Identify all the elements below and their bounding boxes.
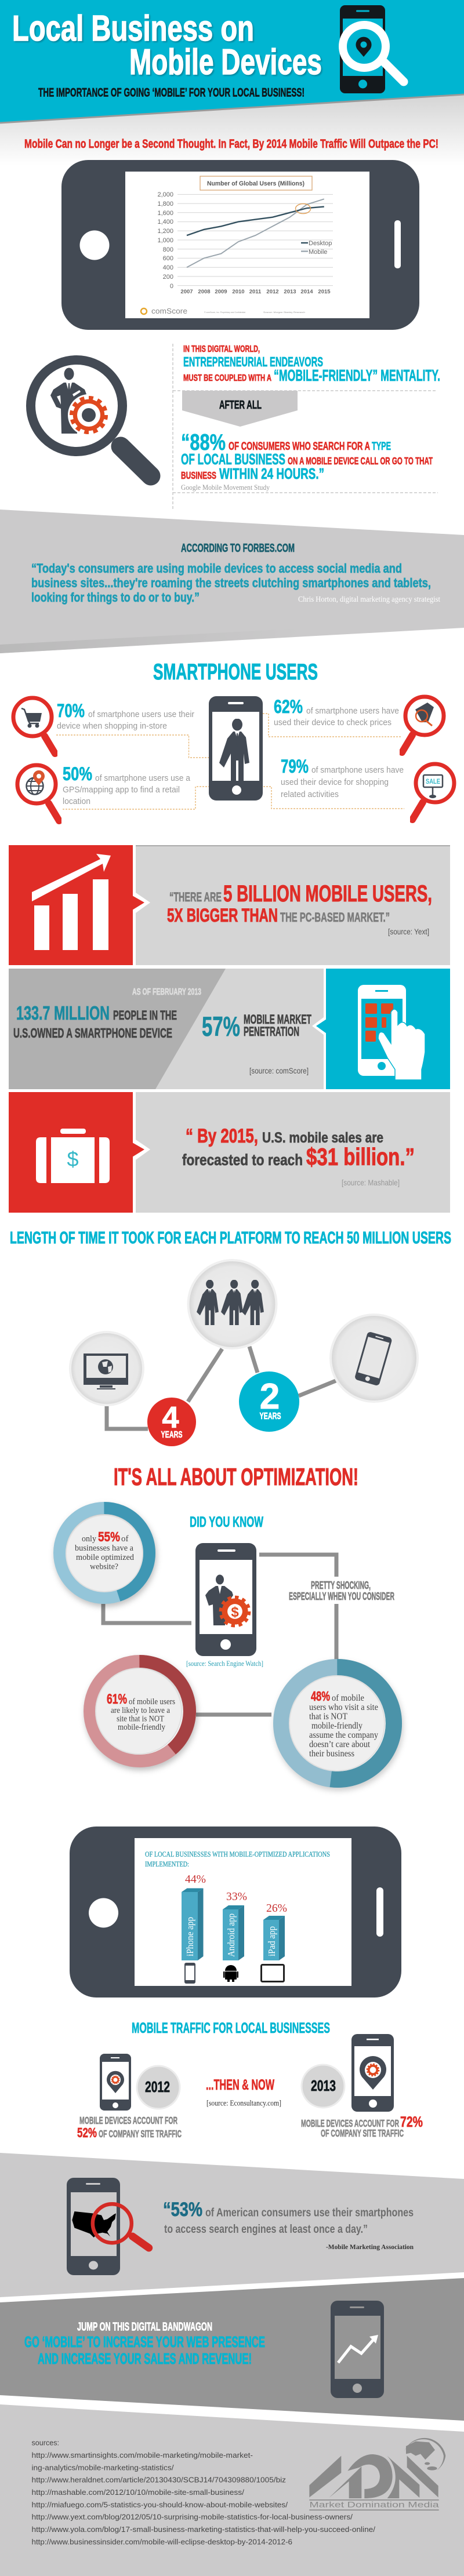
stat: 88 percent of consumers: TYPE <box>372 440 391 453</box>
icon: iPad <box>261 1965 284 1981</box>
panel: sources band <box>0 2404 464 2576</box>
sources list <box>31 2438 375 2546</box>
quote: $31 billion.” <box>306 1143 415 1170</box>
stat: 57 percent <box>202 1011 311 1042</box>
attribution: -Mobile Marketing Association <box>326 2243 414 2251</box>
icon: suitcase with dollar: $ <box>67 1147 79 1171</box>
icon: phone with pin <box>100 2054 131 2111</box>
year badge 2013: 2013 <box>311 2077 336 2094</box>
background gradient under header <box>0 94 464 165</box>
line chart: number of global users: 2,000 <box>157 191 173 198</box>
stat: 88 percent of consumers: WITHIN 24 HOURS.” <box>219 465 324 482</box>
source: [source: Yext] <box>388 927 429 936</box>
heading: mobile traffic: MOBILE TRAFFIC FOR LOCAL BUSINESSES <box>132 2020 330 2036</box>
node: people <box>188 1260 276 1348</box>
quote <box>182 1125 415 1170</box>
logo: Market Domination Media: Market Domination Media <box>309 2499 439 2509</box>
icon: Android robot <box>223 1965 238 1982</box>
caption: OF COMPANY SITE TRAFFIC <box>99 2128 182 2140</box>
line chart: number of global users: 1,400 <box>157 219 173 225</box>
line chart: number of global users <box>141 176 333 315</box>
stat: 50 percent: GPS/mapping app to find a retail <box>63 785 180 795</box>
donut: 55 percent of businesses: mobile optimized <box>76 1553 134 1562</box>
stat: 133.7 million: 133.7 MILLION <box>16 1002 110 1024</box>
bar: iPhone app 44%: 44% <box>185 1873 206 1886</box>
title <box>12 9 322 82</box>
quote: THE PC-BASED MARKET.” <box>280 910 390 925</box>
donut: 55 percent of businesses: of <box>121 1534 129 1544</box>
bar: Android app 33%: 33% <box>226 1890 247 1903</box>
line chart: number of global users: 2009 <box>215 289 227 295</box>
sources list: http://www.yext.com/blog/2012/05/10-surprising-mobile-statistics-for-local-business-owners/ <box>31 2513 353 2522</box>
quote: “THERE ARE <box>169 890 222 904</box>
donut: 48 percent assume company does not care: that is NOT <box>309 1712 347 1722</box>
caption: MOBILE DEVICES ACCOUNT FOR <box>79 2115 177 2126</box>
donut: 55 percent of businesses: only <box>82 1534 96 1544</box>
quote <box>167 881 432 926</box>
donut: 48 percent assume company does not care: mobile-friendly <box>311 1721 362 1731</box>
dashed connectors <box>56 714 404 809</box>
icon: phone with US map and magnifier <box>67 2178 149 2275</box>
connectors <box>107 1347 336 1429</box>
panel: 53 percent of consumers band <box>0 2153 464 2297</box>
quote: to access search engines at least once a day.” <box>164 2223 368 2236</box>
year badge 2012: 2012 <box>145 2078 170 2095</box>
line chart: number of global users: 2012 <box>266 289 279 295</box>
line chart: number of global users: 2014 <box>300 289 313 295</box>
chart title <box>145 1850 330 1868</box>
title: Local Business on <box>12 9 254 49</box>
text block: digital world: MUST BE COUPLED WITH A <box>183 373 271 383</box>
stat: 70 percent: device when shopping in-store <box>57 721 167 731</box>
sources list: sources: <box>31 2438 59 2447</box>
stat: 62 percent: of smartphone users have <box>306 706 399 716</box>
donut: 61 percent likely to leave: of mobile users <box>129 1697 175 1707</box>
quote: forecasted to reach <box>182 1151 303 1169</box>
caption <box>301 2114 423 2139</box>
stat: 79 percent: 79% <box>281 756 309 777</box>
stat: 133.7 million <box>13 1002 177 1040</box>
caption: MOBILE DEVICES ACCOUNT FOR <box>301 2117 399 2129</box>
stat: 88 percent of consumers: OF CONSUMERS WHO SEARCH FOR A <box>229 440 370 453</box>
bar: iPad app 26%: iPad app <box>266 1926 277 1956</box>
text block: digital world: IN THIS DIGITAL WORLD, <box>183 344 260 354</box>
icon: phone with man and coin: $ <box>231 1604 239 1620</box>
traffic 2012 block <box>77 2054 182 2140</box>
line chart: number of global users: 2013 <box>284 289 296 295</box>
stat: 133.7 million: PEOPLE IN THE <box>113 1008 177 1023</box>
donut: 48 percent assume company does not care <box>281 1667 394 1780</box>
panel: 31 billion mobile sales <box>9 1092 450 1213</box>
node: desktop computer <box>70 1332 143 1405</box>
panel: 133.7 million smartphone owners <box>9 969 450 1089</box>
platform timeline diagram <box>70 1260 418 1446</box>
call to action text <box>24 2321 265 2367</box>
text block: digital world: ENTREPRENEURIAL ENDEAVORS <box>183 354 323 369</box>
dashed frame lines <box>173 344 438 509</box>
quote <box>163 2199 414 2236</box>
landscape phone with app bar chart <box>70 1827 401 1998</box>
line chart: number of global users: Number of Global Users (Millions) <box>207 180 304 187</box>
caption: 52% <box>77 2125 97 2140</box>
did you know heading: DID YOU KNOW <box>190 1514 263 1530</box>
call to action text: GO ‘MOBILE’ TO INCREASE YOUR WEB PRESENCE <box>24 2333 265 2351</box>
icon: iPhone <box>184 1963 195 1984</box>
stat: 88 percent of consumers: BUSINESS <box>181 470 216 481</box>
stat: 79 percent: of smartphone users have <box>311 765 404 775</box>
stat: 70 percent: 70% <box>57 700 85 721</box>
line chart: number of global users: 1,800 <box>157 201 173 208</box>
sources list: http://www.businessinsider.com/mobile-will-eclipse-desktop-by-2014-2012-6 <box>31 2538 292 2546</box>
badge: 4 years: 4 <box>162 1401 179 1435</box>
donut: 55 percent of businesses: 55% <box>98 1529 120 1544</box>
quote: 5X BIGGER THAN <box>167 905 278 926</box>
icon: rising bar chart <box>32 854 111 950</box>
bar: iPad app 26% <box>263 1902 287 1960</box>
donut: 55 percent of businesses <box>59 1508 150 1598</box>
chart title: IMPLEMENTED: <box>145 1860 189 1868</box>
pretty shocking text <box>289 1580 394 1602</box>
quote: U.S. mobile sales are <box>262 1130 383 1146</box>
badge: 2 years <box>239 1371 299 1432</box>
stat: 79 percent <box>281 756 454 820</box>
icon: phone with man and coin <box>195 1543 256 1656</box>
icon: phone with pin <box>351 2034 394 2112</box>
icon: phone with rising line <box>331 2301 384 2398</box>
stat: 57 percent: MOBILE MARKET <box>244 1012 311 1027</box>
icon: magnifier with businessman and gear <box>31 360 151 476</box>
sources list: http://mashable.com/2012/10/10/mobile-site-small-business/ <box>31 2488 244 2497</box>
sources list: http://miafuego.com/5-statistics-you-should-know-about-mobile-websites/ <box>31 2501 288 2509</box>
icon: hand tapping phone <box>358 985 425 1080</box>
badge: 2 years: YEARS <box>260 1411 281 1421</box>
icon: phone with magnifier and map pin <box>340 5 404 93</box>
line chart: number of global users: 400 <box>163 264 173 271</box>
call to action text: JUMP ON THIS DIGITAL BANDWAGON <box>77 2321 212 2334</box>
logo: Market Domination Media <box>309 2438 445 2510</box>
title: Mobile Devices <box>129 42 322 82</box>
stat: 70 percent: of smartphone users use their <box>88 710 194 719</box>
panel: 5 billion mobile users <box>9 845 450 965</box>
stat: 50 percent: location <box>63 796 90 806</box>
icon: phone with businessman <box>209 696 263 801</box>
sources list: http://www.heraldnet.com/article/20130430/SCBJ14/704309880/1005/biz <box>31 2476 286 2484</box>
heading: smartphone users: SMARTPHONE USERS <box>153 660 318 685</box>
source: [source: comScore] <box>249 1066 309 1075</box>
stat: 133.7 million: U.S.OWNED A SMARTPHONE DEVICE <box>13 1025 172 1040</box>
then and now label: [source: Econsultancy.com] <box>206 2098 281 2108</box>
header banner <box>0 0 464 123</box>
stat: 50 percent <box>17 763 191 821</box>
line chart: number of global users: 200 <box>163 274 173 281</box>
quote: “53% <box>163 2199 202 2221</box>
stat: 88 percent of consumers: Google Mobile Movement Study <box>181 483 270 492</box>
heading: according to forbes: ACCORDING TO FORBES.COM <box>181 542 295 555</box>
donut: 48 percent assume company does not care: assume the company <box>309 1730 378 1740</box>
donut: 55 percent of businesses: businesses have a <box>75 1544 133 1553</box>
badge: 2 years: 2 <box>260 1377 280 1417</box>
then and now label <box>206 2077 281 2108</box>
stat: 79 percent: used their device for shopping <box>281 777 389 787</box>
call to action text: AND INCREASE YOUR SALES AND REVENUE! <box>38 2350 252 2367</box>
panel: call to action band <box>0 2278 464 2421</box>
donut: 48 percent assume company does not care: 48% <box>311 1689 330 1704</box>
stat: 88 percent of consumers: OF LOCAL BUSINESS <box>181 450 285 468</box>
year badge 2012 <box>137 2066 180 2109</box>
quote: looking for things to do or to buy.” <box>31 590 200 605</box>
line chart: number of global users: 2015 <box>318 289 331 295</box>
text block: digital world <box>183 344 440 384</box>
line chart: number of global users: © comScore, Inc. Proprietary and Confidential. <box>204 311 246 314</box>
stat: 62 percent <box>274 696 444 752</box>
donut: 61 percent likely to leave: 61% <box>107 1691 127 1707</box>
line chart: number of global users: 600 <box>163 255 173 262</box>
icon: suitcase with dollar <box>36 1129 110 1183</box>
quote: “ By 2015, <box>186 1125 258 1147</box>
bar: Android app 33% <box>223 1890 247 1960</box>
donut: 48 percent assume company does not care: of mobile <box>332 1693 364 1703</box>
node: smartphone <box>331 1315 418 1402</box>
quote: of American consumers use their smartphones <box>205 2206 414 2219</box>
stat: 62 percent: used their device to check prices <box>274 718 392 727</box>
donut: 55 percent of businesses: website? <box>90 1562 118 1571</box>
then and now label: ...THEN & NOW <box>206 2077 274 2093</box>
chart title: OF LOCAL BUSINESSES WITH MOBILE-OPTIMIZED APPLICATIONS <box>145 1850 330 1858</box>
badge: 4 years <box>147 1398 196 1446</box>
callout: after all arrow: AFTER ALL <box>219 399 262 412</box>
stat: 57 percent: PENETRATION <box>244 1024 299 1039</box>
caption: OF COMPANY SITE TRAFFIC <box>321 2127 404 2139</box>
traffic 2013 block <box>301 2034 423 2139</box>
stat: 57 percent: 57% <box>202 1011 240 1042</box>
caption: 72% <box>400 2114 423 2130</box>
quote <box>31 561 431 605</box>
landscape phone with global users chart <box>61 160 419 330</box>
donut: 61 percent likely to leave: site that is NOT <box>117 1715 164 1724</box>
donut: 48 percent assume company does not care: users who visit a site <box>309 1702 378 1712</box>
donut: 48 percent assume company does not care: doesn’t care about <box>309 1740 370 1749</box>
line chart: number of global users: Source: Morgan Stanley Research <box>263 311 305 314</box>
line chart: number of global users: 2008 <box>198 289 211 295</box>
line chart: number of global users: 2010 <box>232 289 245 295</box>
donut: 61 percent likely to leave: are likely to leave a <box>111 1706 170 1715</box>
sources list: http://www.yola.com/blog/17-small-business-marketing-statistics-that-will-help-you-succeed-online/ <box>31 2525 375 2534</box>
donut: 61 percent likely to leave: mobile-friendly <box>118 1723 165 1732</box>
source: [source: Mashable] <box>342 1178 400 1187</box>
bar: iPad app 26%: 26% <box>266 1902 287 1915</box>
stat: 79 percent: related activities <box>281 789 339 799</box>
bar: Android app 33%: Android app <box>226 1913 237 1957</box>
connectors between donuts <box>103 1555 336 1715</box>
callout: after all arrow <box>182 391 298 427</box>
smartphone users diagram <box>13 696 454 821</box>
attribution: Chris Horton, digital marketing agency strategist <box>298 595 440 604</box>
line chart: number of global users: Desktop <box>309 240 332 247</box>
source: search engine watch: [source: Search Engine Watch] <box>186 1659 263 1668</box>
bar: iPhone app 44% <box>182 1873 206 1960</box>
as of date: AS OF FEBRUARY 2013 <box>132 987 201 997</box>
stat: 62 percent: 62% <box>274 696 303 717</box>
stat: 70 percent <box>13 698 194 754</box>
panel: forbes quote band <box>0 510 464 653</box>
line chart: number of global users: 1,000 <box>157 237 173 244</box>
line chart: number of global users: 0 <box>170 283 173 290</box>
sources list: http://www.smartinsights.com/mobile-marketing/mobile-market- <box>31 2451 253 2459</box>
stat: 79 percent: SALE <box>426 777 440 785</box>
stat: 50 percent: of smartphone users use a <box>95 773 191 783</box>
line chart: number of global users: 2011 <box>249 289 262 295</box>
bar: iPhone app 44%: iPhone app <box>184 1917 195 1956</box>
line chart: number of global users: 1,200 <box>157 228 173 235</box>
year badge 2013 <box>302 2065 345 2108</box>
line chart: number of global users: 2007 <box>180 289 193 295</box>
stat: 88 percent of consumers <box>181 430 433 492</box>
donut: 48 percent assume company does not care: their business <box>309 1749 354 1759</box>
line chart: number of global users: 1,600 <box>157 210 173 217</box>
donut: 61 percent likely to leave <box>90 1661 190 1761</box>
badge: 4 years: YEARS <box>161 1430 183 1440</box>
line chart: number of global users: 800 <box>163 246 173 253</box>
sources list: ing-analytics/mobile-marketing-statistics/ <box>31 2464 174 2472</box>
pretty shocking text: PRETTY SHOCKING, <box>311 1580 371 1591</box>
stat: 50 percent: 50% <box>63 763 92 784</box>
subtitle: THE IMPORTANCE OF GOING ‘MOBILE’ FOR YOUR LOCAL BUSINESS! <box>38 86 304 100</box>
stat: 88 percent of consumers: “88% <box>181 430 226 455</box>
line chart: number of global users: Mobile <box>309 249 327 256</box>
caption <box>77 2115 182 2140</box>
line chart: number of global users: comScore <box>151 307 187 315</box>
